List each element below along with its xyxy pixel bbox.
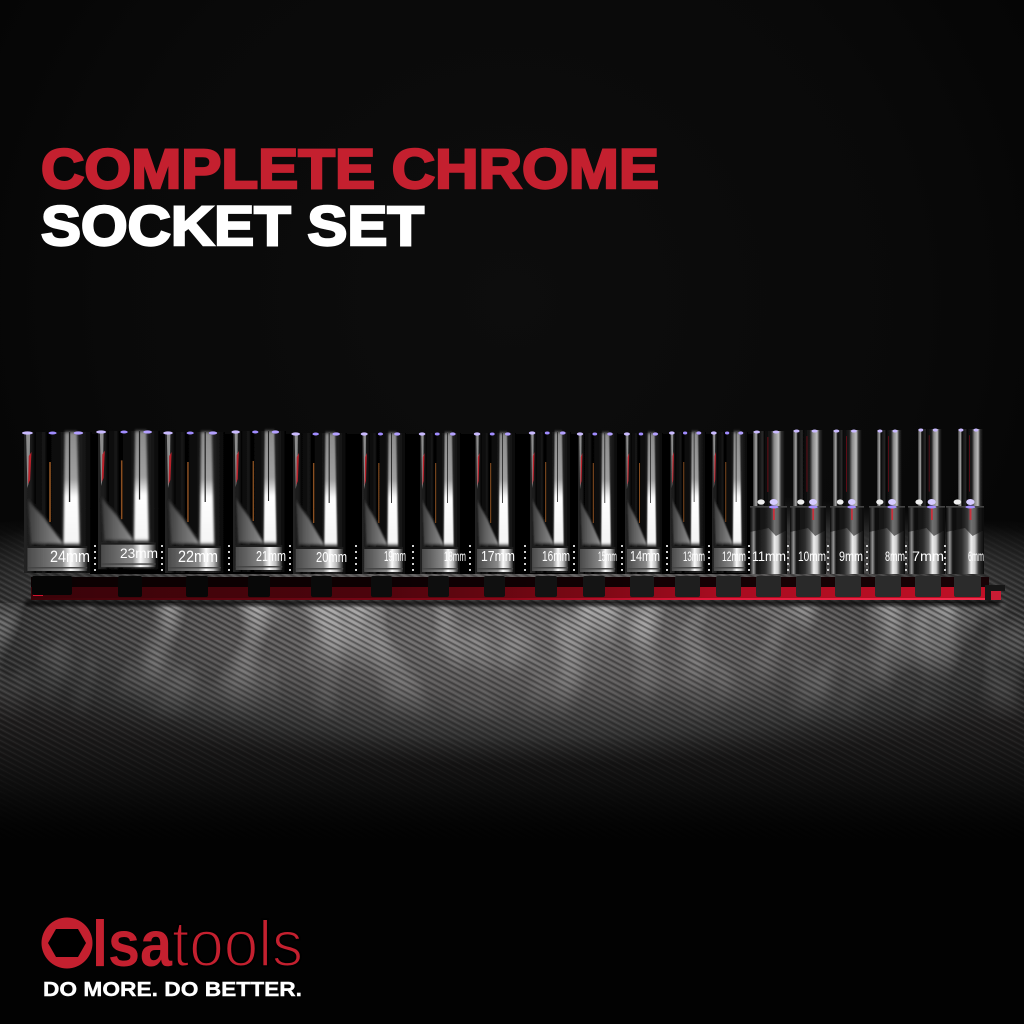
tagline: DO MORE. DO BETTER.: [43, 978, 302, 1001]
socket 11mm: [750, 430, 787, 574]
socket 18mm: 18mm: [444, 548, 466, 564]
textured floor: [0, 505, 1024, 806]
knurl highlights between sockets: [95, 545, 945, 572]
clips: [32, 576, 981, 597]
logo wordmark: lsa: [92, 907, 173, 980]
socket 11mm: 11mm: [752, 548, 786, 564]
socket 13mm: [669, 431, 706, 573]
socket 10mm: [790, 429, 826, 574]
title line 1: COMPLETE CHROME: [41, 137, 659, 200]
socket row: [22, 428, 984, 574]
socket 22mm: [163, 431, 225, 573]
socket 24mm: 24mm: [50, 547, 90, 566]
socket 7mm: 7mm: [912, 548, 944, 564]
socket 6mm: 6mm: [968, 548, 984, 564]
logo: [42, 907, 303, 1001]
socket 20mm: 20mm: [316, 549, 347, 566]
socket 8mm: 8mm: [885, 548, 905, 564]
socket 16mm: [529, 431, 571, 573]
socket 23mm: [96, 430, 160, 569]
title line 2: SOCKET SET: [41, 194, 424, 257]
socket 15mm: 15mm: [598, 548, 617, 564]
socket 19mm: 19mm: [384, 548, 406, 565]
socket 7mm: [908, 428, 945, 574]
socket 18mm: [419, 432, 466, 574]
dark band behind large sockets: [90, 434, 755, 574]
socket 14mm: [624, 432, 663, 574]
socket 10mm: 10mm: [798, 548, 826, 564]
socket 21mm: 21mm: [256, 548, 286, 565]
socket 17mm: [474, 432, 516, 574]
socket 13mm: 13mm: [683, 548, 705, 564]
socket 8mm: [869, 429, 905, 574]
socket 14mm: 14mm: [630, 548, 660, 565]
socket 20mm: [291, 432, 347, 574]
socket 16mm: 16mm: [542, 548, 570, 565]
logo hexagon O mark: [42, 918, 92, 968]
socket 17mm: 17mm: [481, 548, 515, 565]
rail shadow: [25, 600, 1000, 606]
socket 12mm: 12mm: [722, 548, 746, 564]
socket 23mm: 23mm: [120, 545, 158, 561]
rail body: [31, 577, 989, 598]
socket 12mm: [711, 431, 748, 573]
socket 15mm: [577, 432, 618, 574]
socket 9mm: 9mm: [839, 548, 863, 564]
rail with clips: [25, 576, 1005, 606]
logo: tools: [172, 907, 303, 980]
socket 24mm: [22, 431, 92, 573]
socket 21mm: [231, 430, 286, 572]
socket 19mm: [361, 432, 406, 574]
socket 22mm: 22mm: [178, 547, 218, 566]
socket 6mm: [946, 428, 984, 574]
title: [41, 137, 659, 257]
socket 9mm: [830, 429, 864, 574]
